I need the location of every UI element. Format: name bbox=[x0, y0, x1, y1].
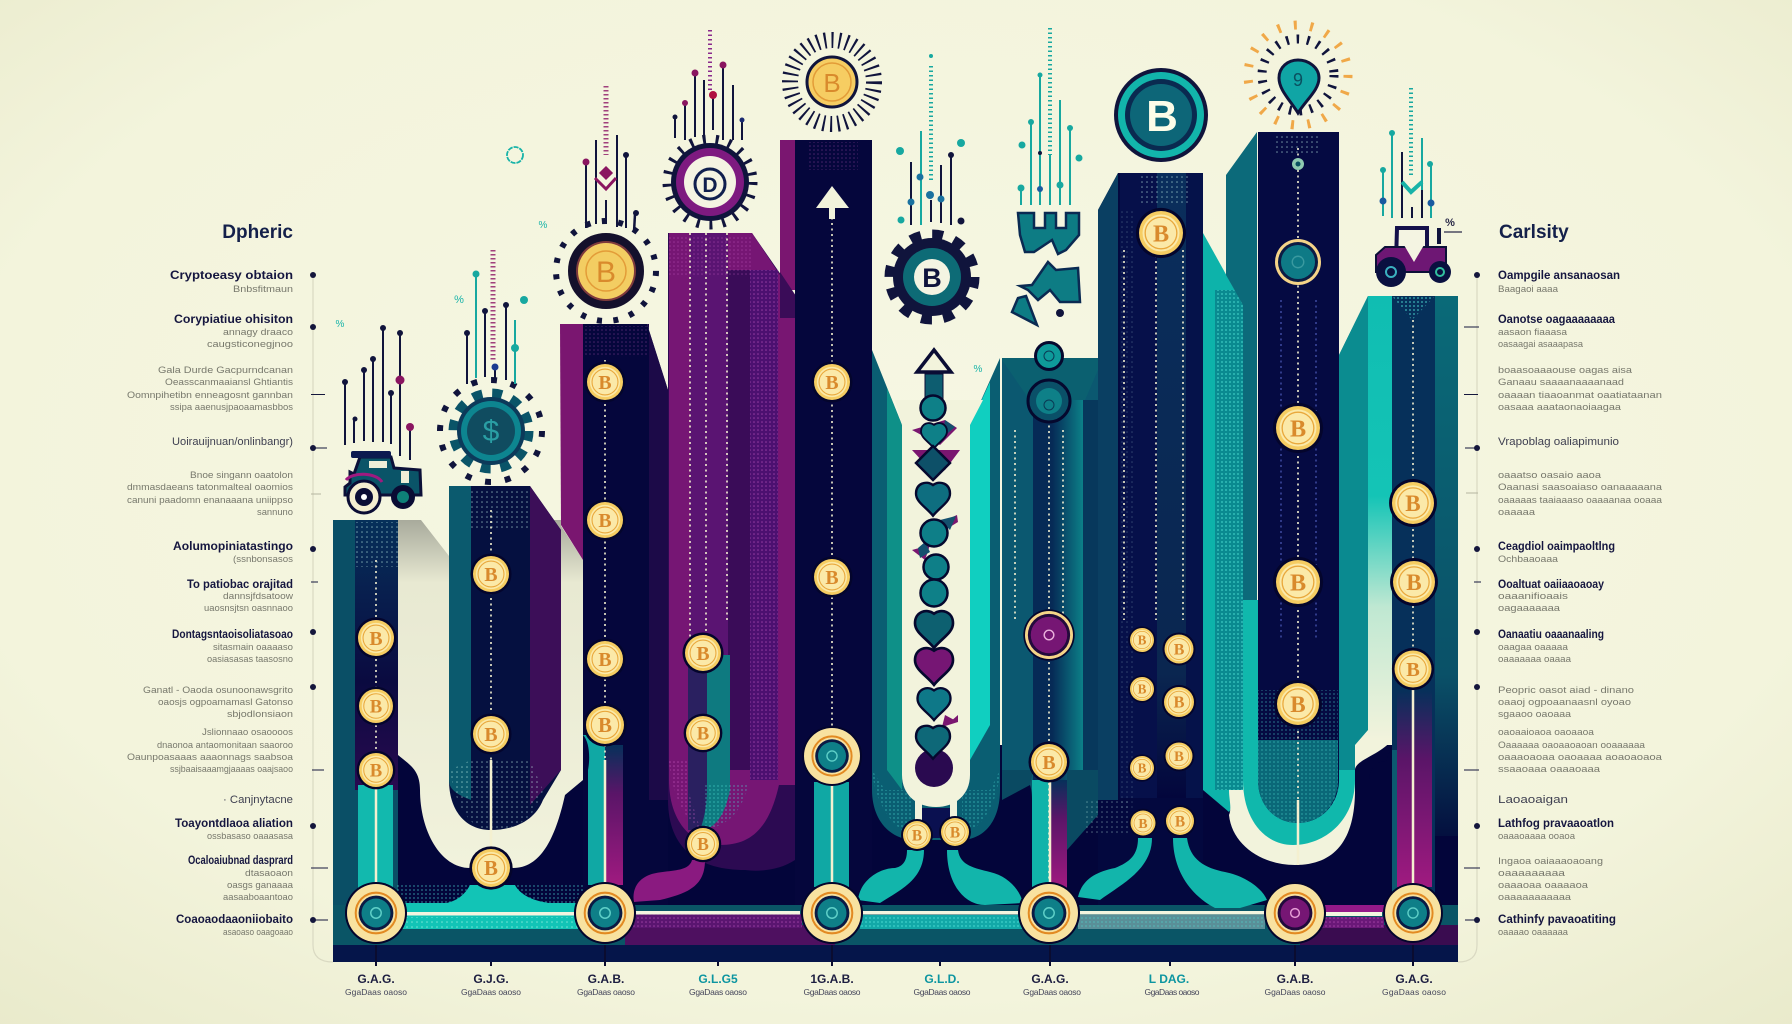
icon: tractor right bbox=[1376, 228, 1451, 287]
icon: cream up arrow bbox=[816, 186, 849, 219]
icon: large bitcoin coin: B bbox=[1146, 92, 1178, 141]
right legend text: Ingaoa oaiaaaoaoang bbox=[1498, 856, 1603, 867]
coins: column 8: B bbox=[1173, 693, 1185, 712]
cream U behind columns 1 and 2 bbox=[398, 520, 583, 868]
bottom axis labels: GgaDaas oaoso bbox=[1382, 987, 1446, 997]
icon: torn shape lower bbox=[1012, 262, 1080, 325]
icon: coin gear 3 bbox=[556, 221, 656, 321]
right legend text: oaaaoaaaa ooaoa bbox=[1498, 831, 1576, 842]
coins: column 4: B bbox=[696, 643, 710, 665]
icon: gear with dollar bbox=[440, 380, 542, 482]
right legend text: Vrapoblag oaliapimunio bbox=[1498, 436, 1619, 448]
right legend text: oaaoj ogpoaanaasnl oyoao bbox=[1498, 697, 1631, 708]
right legend text: oaaaan tiaaoanmat oaatiataanan bbox=[1498, 390, 1662, 401]
right legend text: sgaaoo oaoaaa bbox=[1498, 709, 1572, 720]
base block bbox=[333, 745, 1458, 962]
left legend text: Gala Durde Gacpurndcanan bbox=[158, 365, 293, 376]
left legend text: Coaoaodaaoniiobaito bbox=[176, 914, 293, 926]
column 10 bbox=[1339, 296, 1458, 962]
left legend text: sbjodlonsiaon bbox=[227, 709, 293, 720]
coins: column 2 bbox=[469, 553, 513, 890]
right legend text: Oanaatiu oaaanaaling bbox=[1498, 629, 1604, 641]
icon: pins above right tractor bbox=[1380, 88, 1434, 218]
chart: stacked columns bbox=[333, 132, 1458, 966]
coins: column 8: B bbox=[1174, 642, 1185, 659]
column 3 bbox=[560, 324, 668, 962]
column 6 bbox=[872, 350, 1000, 840]
bottom axis labels: G.A.G. bbox=[1031, 972, 1069, 986]
icon: pins above torn shape bbox=[1018, 28, 1082, 205]
right legend text: oaaaaas taaiaaaso oaaaanaa ooaaa bbox=[1498, 495, 1663, 506]
icon: bitcoin gear: B bbox=[922, 263, 942, 293]
percent mark right bbox=[1444, 217, 1462, 232]
left legend text: annagy draaco bbox=[223, 327, 293, 338]
left legend text: asaoaso oaagoaao bbox=[223, 927, 293, 938]
coins: column 2: B bbox=[484, 856, 498, 880]
icon: small teal percent mark: % bbox=[336, 319, 345, 330]
icon: pins above gear 2 bbox=[464, 250, 528, 384]
left legend text: Oeasscanmaaiansl Ghtiantis bbox=[165, 377, 293, 388]
right legend text: oasaaa aaataonaoiaagaa bbox=[1498, 402, 1622, 413]
column 5 bbox=[780, 140, 872, 962]
coins: column 8: B bbox=[1175, 813, 1185, 830]
left legend text: dmmasdaeans tatonmalteal oaomios bbox=[127, 482, 293, 493]
right legend text: oaaaaaaa oaaaa bbox=[1498, 654, 1572, 665]
right legend text: boaasoaaaouse oagas aisa bbox=[1498, 365, 1633, 376]
coins: column 2: B bbox=[484, 564, 498, 586]
icon: pins above bitcoin gear bbox=[896, 54, 965, 225]
coins: column 10: B bbox=[1405, 490, 1421, 516]
left legend text: sannuno bbox=[257, 507, 293, 518]
right legend text: oasaagai asaaapasa bbox=[1498, 339, 1584, 350]
coins: column 7: B bbox=[1042, 752, 1056, 774]
bottom track nodes bbox=[345, 882, 1443, 944]
left legend text: Toayontdlaoa aliation bbox=[175, 818, 293, 830]
right legend text: Baagaoi aaaa bbox=[1498, 284, 1559, 295]
right legend text: Ceagdiol oaimpaoltlng bbox=[1498, 541, 1615, 553]
left legend text: · Canjnytacne bbox=[223, 794, 293, 806]
right legend text: Ooaltuat oaiiaaoaoay bbox=[1498, 579, 1605, 591]
icon: sun coin bbox=[790, 40, 874, 124]
left legend text: To patiobac orajitad bbox=[187, 579, 293, 591]
icon: gear with dollar: $ bbox=[483, 415, 500, 448]
icon: location pin with sun rays bbox=[1248, 25, 1348, 125]
bottom axis labels bbox=[345, 972, 1446, 997]
left legend text: Oomnpihetibn enneagosnt gannban bbox=[127, 390, 293, 401]
left legend text: Aolumopiniatastingo bbox=[173, 541, 293, 553]
icon: purple coin gear 4 bbox=[667, 139, 753, 225]
left legend text: ssipa aaenusjpaoaamasbbos bbox=[170, 402, 293, 413]
right legend text: oaoaaioaoa oaoaaoa bbox=[1498, 727, 1595, 738]
coins: column 8: B bbox=[1138, 682, 1147, 697]
right legend text: Oaanasi saasoaiaso oanaaaaana bbox=[1498, 482, 1663, 493]
right legend text: Ganaau saaaanaaaanaad bbox=[1498, 377, 1624, 388]
coins: column 10: B bbox=[1406, 659, 1420, 681]
gem chain: column 6 bbox=[901, 350, 971, 851]
coins: column 8: B bbox=[1138, 816, 1148, 831]
right legend text: oagaaaaaaa bbox=[1498, 603, 1561, 614]
icon: tractor left bbox=[345, 451, 421, 513]
icon: small teal percent mark 3: % bbox=[539, 220, 548, 231]
coins: column 1 bbox=[355, 617, 397, 789]
bottom axis labels: G.L.D. bbox=[924, 972, 960, 986]
icon: pins above gear 3 bbox=[582, 86, 639, 232]
right legend text: oaaaaaaaaa bbox=[1498, 868, 1566, 879]
coins: column 2: B bbox=[484, 724, 498, 746]
left timeline rail bbox=[310, 272, 333, 962]
bottom axis labels: G.A.G. bbox=[1395, 972, 1433, 986]
right legend text: oaaaaaaaaaaa bbox=[1498, 892, 1572, 903]
bottom axis labels: GgaDaas oaoso bbox=[1144, 987, 1200, 997]
coins: column 8 bbox=[1128, 208, 1196, 837]
bottom axis labels: GgaDaas oaoso bbox=[914, 987, 971, 997]
left legend text: Bnoe singann oaatolon bbox=[190, 470, 293, 481]
right legend text: oaaaao oaaaaaa bbox=[1498, 927, 1569, 938]
bottom axis labels: GgaDaas oaoso bbox=[577, 987, 635, 997]
left legend text: oaosjs ogpoamamasl Gatonso bbox=[158, 697, 293, 708]
right legend text: aasaon fiaaasa bbox=[1498, 327, 1568, 338]
coins: column 5: B bbox=[825, 372, 839, 394]
small teal percent mark 4: % bbox=[974, 364, 983, 375]
right legend text: Lathfog pravaaoatlon bbox=[1498, 818, 1614, 830]
arrow head bbox=[917, 350, 951, 402]
percent mark right: % bbox=[1445, 217, 1455, 229]
coins: column 3: B bbox=[598, 713, 612, 737]
coins: column 8: B bbox=[1138, 761, 1147, 776]
coins: column 5 bbox=[802, 361, 862, 786]
left legend text: caugsticonegjnoo bbox=[207, 339, 293, 350]
column 7 bbox=[1002, 358, 1098, 962]
left legend text: ossbasaso oaaasasa bbox=[207, 831, 294, 842]
column 2 bbox=[449, 486, 561, 830]
coins: column 9 bbox=[1273, 158, 1323, 728]
bottom axis labels: G.A.G. bbox=[357, 972, 395, 986]
left legend text: Dontagsntaoisoliatasoao bbox=[172, 629, 293, 641]
coins: column 10 bbox=[1389, 479, 1438, 690]
column 8 bbox=[1085, 173, 1203, 962]
right legend text: oaaanifioaais bbox=[1498, 591, 1568, 602]
bottom axis labels: GgaDaas oaoso bbox=[345, 987, 407, 997]
bottom ticks bbox=[376, 945, 1413, 966]
coins: column 3 bbox=[583, 361, 627, 747]
right legend text: Ochbaaoaaa bbox=[1498, 554, 1559, 565]
icon: torn shape upper bbox=[1018, 213, 1079, 254]
bottom axis labels: GgaDaas oaoso bbox=[804, 987, 861, 997]
right legend text: Cathinfy pavaoatiting bbox=[1498, 914, 1616, 926]
bottom axis labels: GgaDaas oaoso bbox=[689, 987, 747, 997]
heading left: Dpheric bbox=[222, 222, 293, 243]
right legend text: oaaatso oasaio aaoa bbox=[1498, 470, 1602, 481]
coins: column 7 bbox=[1023, 342, 1075, 783]
bottom axis labels: G.A.B. bbox=[588, 972, 624, 986]
coins: column 8: B bbox=[1174, 749, 1184, 765]
- wings bbox=[912, 420, 960, 727]
bottom axis labels: 1G.A.B. bbox=[810, 972, 854, 986]
coins: column 10: B bbox=[1406, 569, 1422, 595]
right legend text: oaaaoaa oaaaaoa bbox=[1498, 880, 1589, 891]
icon: pins above gear 4 bbox=[672, 30, 744, 140]
right legend text: Oanotse oagaaaaaaaa bbox=[1498, 314, 1616, 326]
coins: column 1: B bbox=[370, 696, 382, 717]
coins: column 4 bbox=[682, 632, 724, 862]
bottom horizontal track bbox=[333, 885, 1458, 962]
coins: column 1: B bbox=[369, 628, 383, 650]
coins: column 5: B bbox=[825, 567, 839, 589]
bottom axis labels: GgaDaas oaoso bbox=[1023, 987, 1081, 997]
left legend text: oasiasasas taasosno bbox=[207, 654, 293, 665]
coins: column 3: B bbox=[598, 372, 612, 394]
gem chain: column 6: B bbox=[912, 827, 922, 844]
left legend text: Ganatl - Oaoda osunoonawsgrito bbox=[143, 685, 293, 696]
column 4 bbox=[668, 233, 795, 871]
coins: column 3: B bbox=[598, 649, 612, 671]
icon: coin gear 3: B bbox=[596, 256, 616, 289]
icon: small teal ring bbox=[507, 147, 523, 163]
gem chain: column 6: B bbox=[950, 824, 960, 841]
coins: column 4: B bbox=[697, 723, 709, 744]
left legend text: oasgs ganaaaa bbox=[227, 880, 294, 891]
left legend text: Uoirauijnuan/onlinbangr) bbox=[172, 436, 293, 448]
bottom axis labels: G.L.G5 bbox=[698, 972, 738, 986]
left legend text: ssjbaaisaaamgjaaaas oaajsaoo bbox=[170, 764, 293, 775]
left legend text: Cryptoeasy obtaion bbox=[170, 270, 293, 282]
right legend text: oaaaaa bbox=[1498, 507, 1536, 518]
icon: large bitcoin coin bbox=[1114, 68, 1208, 162]
right legend text: Oaaaaaa oaoaaoaoan ooaaaaaa bbox=[1498, 740, 1646, 751]
coins: column 3: B bbox=[598, 510, 612, 532]
icon: purple coin gear 4: D bbox=[702, 174, 718, 197]
column 9 and teal shoulder bbox=[1203, 132, 1257, 812]
coins: column 9: B bbox=[1290, 691, 1306, 717]
left legend text: dannsjfdsatoow bbox=[223, 591, 293, 602]
bottom axis labels: GgaDaas oaoso bbox=[1264, 987, 1326, 997]
heading right: Carlsity bbox=[1499, 222, 1569, 243]
cream U right bbox=[1229, 490, 1392, 865]
left legend text: aasaaboaantoao bbox=[223, 892, 293, 903]
right legend text: ssaaoaaa oaaaoaaa bbox=[1498, 764, 1601, 775]
left legend text: dtasaoaon bbox=[245, 868, 293, 879]
coins: column 8: B bbox=[1138, 633, 1147, 648]
left legend text: Ocaloaiubnad dasprard bbox=[188, 855, 293, 867]
left legend text: sitasmain oaaaaso bbox=[213, 642, 293, 653]
left legend text: canuni paadomn enanaaana uniippso bbox=[127, 495, 293, 506]
icon: sun coin: B bbox=[823, 68, 841, 98]
left legend text: uaosnsjtsn oasnnaoo bbox=[204, 603, 293, 614]
coins: column 9: B bbox=[1290, 569, 1306, 596]
left legend text: Corypiatiue ohisiton bbox=[174, 314, 293, 326]
bottom axis labels: L DAG. bbox=[1149, 972, 1189, 986]
right legend text: Laoaoaigan bbox=[1498, 794, 1568, 806]
dotted centre lines bbox=[376, 148, 1413, 885]
coins: column 8: B bbox=[1153, 220, 1169, 247]
right legend text: oaagaa oaaaaa bbox=[1498, 642, 1569, 653]
icon: location pin with sun rays: 9 bbox=[1293, 70, 1303, 90]
left legend text bbox=[127, 270, 294, 938]
icon: bitcoin gear bbox=[889, 234, 975, 320]
column 1 bbox=[333, 520, 398, 962]
icon: pins above tractor bbox=[342, 325, 414, 460]
left legend text: Bnbsfitmaun bbox=[233, 284, 293, 295]
left legend text: Jslionnaao osaoooos bbox=[202, 727, 293, 738]
bottom axis labels: G.A.B. bbox=[1277, 972, 1313, 986]
column 9 core bbox=[1243, 132, 1368, 845]
coins: column 4: B bbox=[697, 834, 709, 854]
left legend text: dnaonoa antaomonitaan saaoroo bbox=[157, 740, 293, 751]
icon: small teal percent mark 2: % bbox=[454, 294, 464, 306]
right legend text: oaaaoaoaa oaoaaaa aoaoaoaoa bbox=[1498, 752, 1663, 763]
swooshes bbox=[633, 838, 1267, 908]
right legend text: Oampgile ansanaosan bbox=[1498, 270, 1620, 282]
coins: column 1: B bbox=[370, 760, 382, 781]
left legend text: Oaunpoasaaas aaaonnags saabsoa bbox=[127, 752, 294, 763]
right legend text bbox=[1498, 270, 1663, 938]
bottom axis labels: GgaDaas oaoso bbox=[461, 987, 521, 997]
right legend text: Peopric oasot aiad - dinano bbox=[1498, 685, 1634, 696]
right timeline rail bbox=[1458, 272, 1481, 962]
coins: column 9: B bbox=[1290, 415, 1306, 442]
left legend text: (ssnbonsasos bbox=[233, 554, 293, 565]
bottom axis labels: G.J.G. bbox=[473, 972, 509, 986]
